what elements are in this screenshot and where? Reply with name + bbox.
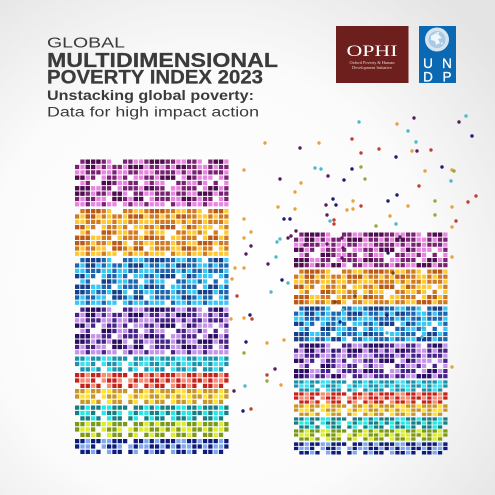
band: yellow <box>75 391 230 402</box>
logo: OPHI <box>336 26 408 83</box>
band: red <box>75 375 230 386</box>
scattered dots <box>231 116 476 411</box>
band: lime <box>294 431 449 439</box>
logo: UNDP: P <box>442 70 452 84</box>
band: orange <box>75 211 230 254</box>
band: red <box>294 394 449 402</box>
title: GLOBAL: GLOBAL <box>47 34 125 52</box>
band: violet <box>294 344 448 378</box>
title: Poverty Index 2023: POVERTY INDEX 2023 <box>47 68 263 88</box>
band: blue <box>294 306 448 342</box>
band: teal <box>294 382 449 390</box>
title: Multidimensional: MULTIDIMENSIONAL <box>47 50 278 72</box>
band: blue <box>75 260 230 303</box>
band: teal <box>75 359 230 369</box>
band: dark teal <box>75 408 230 418</box>
band: orange <box>294 270 448 304</box>
icon: UN emblem <box>425 28 449 52</box>
title block <box>47 34 278 120</box>
logo: UNDP: N <box>442 56 452 71</box>
tagline: Data for high impact action <box>47 104 259 120</box>
logo: OPHI: Oxford Poverty & Human <box>350 60 395 65</box>
logo: UNDP: D <box>423 70 433 84</box>
band: lime <box>75 424 230 435</box>
band: dark teal <box>294 419 449 427</box>
logo: UNDP <box>419 26 456 84</box>
band: navy <box>75 441 230 452</box>
stacked dot grid: right <box>294 235 449 453</box>
logo: OPHI: OPHI <box>346 43 398 60</box>
band: navy <box>294 444 449 453</box>
logo: UNDP: U <box>423 56 433 71</box>
logo: OPHI: Development Initiative <box>352 65 392 70</box>
stacked dot grid: left <box>75 162 230 452</box>
subtitle: Unstacking global poverty: <box>47 88 254 103</box>
band: pink <box>294 232 448 268</box>
band: violet <box>75 310 230 352</box>
band: yellow <box>294 406 449 414</box>
band: pink <box>75 162 230 204</box>
